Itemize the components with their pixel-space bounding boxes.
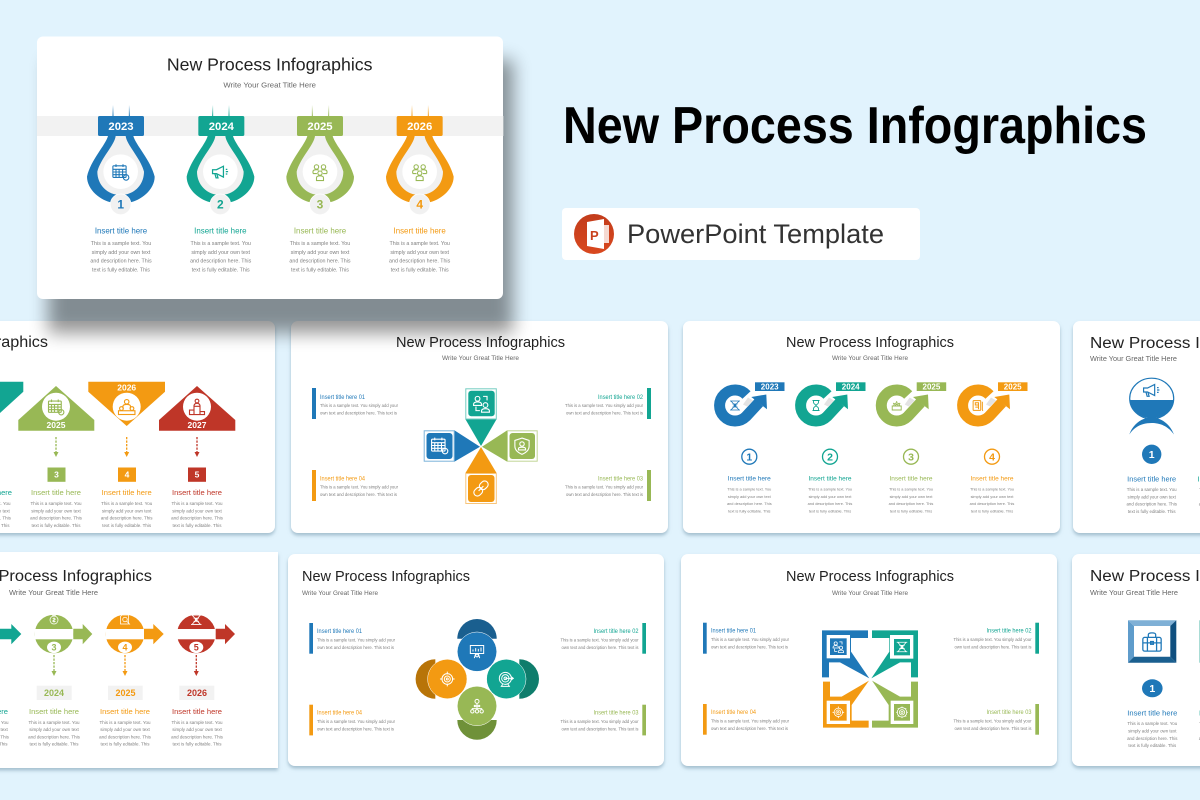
item descriptions: and description here. This bbox=[171, 516, 224, 521]
side labels right: This is a sample text. You simply add your bbox=[954, 637, 1032, 642]
drop step 3: 3 bbox=[317, 198, 324, 212]
item descriptions: text is fully editable. This bbox=[32, 523, 81, 528]
side labels left: Insert title here 04 bbox=[317, 710, 363, 716]
item descriptions: simply add your own text bbox=[100, 727, 151, 732]
slide title: New Process Infographics bbox=[302, 568, 470, 585]
item descriptions: This is a sample text. You bbox=[1127, 487, 1177, 492]
item descriptions: This is a sample text. You bbox=[28, 720, 80, 725]
side labels right: own text and description here. This text is bbox=[955, 645, 1032, 650]
main heading: New Process Infographics bbox=[563, 97, 1147, 155]
side labels right: Insert title here 02 bbox=[598, 395, 644, 401]
side labels right: Insert title here 02 bbox=[594, 629, 639, 635]
number badge bbox=[1142, 445, 1161, 464]
side labels right: own text and description here. This text is bbox=[955, 726, 1032, 731]
red arrow circle bbox=[177, 615, 235, 653]
panel: featured slide with drop shapes bbox=[37, 36, 513, 333]
side labels right: This is a sample text. You simply add your bbox=[565, 403, 644, 408]
side labels left bbox=[309, 623, 396, 735]
item descriptions: simply add your own text bbox=[102, 508, 152, 514]
item descriptions: and description here. This bbox=[101, 516, 153, 521]
side labels right bbox=[561, 623, 646, 735]
dashed arrows bbox=[52, 655, 199, 676]
number squares: 4 bbox=[125, 470, 130, 480]
side labels right: own text and description here. This text is bbox=[562, 645, 638, 650]
orange pentagon bbox=[88, 382, 165, 426]
side labels right: Insert title here 03 bbox=[986, 710, 1032, 716]
drop step 4: simply add your own text bbox=[390, 250, 449, 256]
item descriptions: simply add your own text bbox=[31, 508, 82, 514]
side labels left: This is a sample text. You simply add your bbox=[711, 637, 790, 642]
circular arrow 2025 orange: 2025 bbox=[1004, 383, 1022, 392]
item descriptions: text is fully editable. This bbox=[30, 742, 79, 746]
side labels left: own text and description here. This text is bbox=[711, 726, 788, 731]
drop step 2: simply add your own text bbox=[191, 250, 250, 256]
drop step 3: and description here. This bbox=[289, 259, 351, 265]
item descriptions: simply add your own text bbox=[728, 494, 772, 499]
side labels left: Insert title here 04 bbox=[320, 476, 366, 482]
item descriptions: simply add your own text bbox=[809, 494, 852, 499]
side labels right bbox=[954, 623, 1039, 735]
item descriptions: text is fully editable. This bbox=[728, 508, 771, 514]
circular arrow 2023: 2023 bbox=[761, 383, 779, 392]
item titles bbox=[1127, 476, 1200, 484]
side labels right: This is a sample text. You simply add your bbox=[954, 718, 1032, 724]
panel: slide with bevel frame (bottom far right) bbox=[1072, 554, 1200, 766]
slide title: New Process Infographics bbox=[396, 334, 565, 351]
drop step 1: text is fully editable. This bbox=[92, 267, 150, 273]
numbered circles: 2 bbox=[827, 452, 833, 464]
item descriptions: This is a sample text. You bbox=[30, 501, 82, 506]
item descriptions: and description here. This bbox=[970, 501, 1014, 506]
item descriptions: text is fully editable. This bbox=[1128, 509, 1176, 514]
slide title: New Process Infographics bbox=[167, 55, 372, 75]
item descriptions: and description here. This bbox=[889, 501, 933, 506]
item titles bbox=[1127, 710, 1200, 718]
circular arrow 2025 bbox=[881, 382, 946, 421]
item descriptions: text is fully editable. This bbox=[971, 508, 1013, 514]
drop step 4 bbox=[386, 105, 454, 273]
side labels right bbox=[565, 388, 651, 501]
side labels left: Insert title here 04 bbox=[711, 710, 757, 716]
slide subtitle: Write Your Great Title Here bbox=[9, 590, 98, 597]
icon: PowerPoint logo: P bbox=[590, 228, 599, 243]
drop step 1: 2023 bbox=[108, 121, 134, 133]
item titles: Insert title here bbox=[1127, 476, 1176, 484]
circular arrow 2023 bbox=[720, 382, 784, 421]
item descriptions: text is fully editable. This bbox=[809, 508, 851, 514]
number squares: 5 bbox=[195, 470, 200, 480]
item descriptions: This is a sample text. You bbox=[970, 486, 1014, 492]
item titles: Insert title here bbox=[102, 490, 152, 497]
side labels left: Insert title here 01 bbox=[320, 395, 366, 401]
item titles: Insert title here bbox=[172, 707, 222, 716]
drop step 3: text is fully editable. This bbox=[291, 267, 349, 273]
side labels right: This is a sample text. You simply add your bbox=[565, 484, 644, 490]
drop step 2: 2 bbox=[217, 198, 224, 212]
year boxes bbox=[37, 686, 214, 700]
side labels left bbox=[703, 623, 790, 735]
drop step 4: and description here. This bbox=[389, 259, 451, 265]
orange pentagon: 2026 bbox=[117, 382, 136, 392]
number badge: 1 bbox=[1149, 449, 1155, 461]
item descriptions: and description here. This bbox=[99, 734, 152, 740]
panel: slide with arrow circles (bottom left) bbox=[0, 552, 278, 768]
drop step 3: 2025 bbox=[307, 121, 333, 133]
item titles: Insert title here bbox=[29, 707, 79, 716]
side labels left: This is a sample text. You simply add your bbox=[320, 484, 399, 490]
drop step 1: This is a sample text. You bbox=[91, 241, 151, 247]
item descriptions: text is fully editable. This bbox=[101, 742, 150, 746]
slide title: New Process Infographics bbox=[786, 568, 954, 585]
item descriptions: simply add your own text bbox=[29, 727, 80, 732]
numbered circles bbox=[742, 449, 1000, 464]
item descriptions: and description here. This bbox=[1127, 736, 1178, 741]
numbered circles: 1 bbox=[746, 452, 752, 464]
slide subtitle: Write Your Great Title Here bbox=[832, 355, 908, 362]
slide subtitle: Write Your Great Title Here bbox=[442, 355, 519, 362]
slide title: New Process Infographics bbox=[786, 334, 954, 351]
drop step 2: text is fully editable. This bbox=[192, 267, 250, 273]
numbered circles: 3 bbox=[908, 452, 914, 464]
side labels left: own text and description here. This text is bbox=[711, 645, 788, 650]
drop step 2: Insert title here bbox=[194, 226, 247, 235]
item titles: Insert title here bbox=[808, 476, 852, 482]
slide subtitle: Write Your Great Title Here bbox=[1090, 590, 1178, 597]
badge label: PowerPoint Template bbox=[627, 219, 884, 249]
dashed arrows bbox=[54, 437, 200, 457]
item descriptions: text is fully editable. This bbox=[1128, 743, 1177, 748]
drop step 3: Insert title here bbox=[294, 226, 347, 235]
item descriptions: and description here. This bbox=[727, 501, 772, 506]
side labels right: This is a sample text. You simply add your bbox=[561, 638, 639, 642]
drop step 1: 1 bbox=[117, 198, 124, 212]
cross diagram bbox=[424, 389, 537, 504]
red pentagon: 2027 bbox=[188, 420, 207, 430]
slide subtitle: Write Your Great Title Here bbox=[832, 590, 908, 597]
item descriptions: This is a sample text. You bbox=[808, 486, 852, 492]
item descriptions bbox=[0, 501, 224, 528]
side labels left: This is a sample text. You simply add your bbox=[317, 638, 396, 642]
circular arrow 2024: 2024 bbox=[842, 383, 860, 392]
side labels left: Insert title here 01 bbox=[711, 629, 757, 635]
item titles bbox=[728, 476, 1014, 482]
drop step 3: simply add your own text bbox=[291, 250, 350, 256]
item descriptions: simply add your own text bbox=[172, 727, 223, 732]
item descriptions: This is a sample text. You bbox=[99, 720, 151, 725]
item descriptions bbox=[0, 720, 224, 746]
panel: slide with square brackets (bottom right) bbox=[681, 554, 1057, 766]
green arrow circle: 3 bbox=[51, 642, 57, 652]
number badge bbox=[1142, 679, 1163, 697]
item titles: Insert title here bbox=[172, 490, 222, 497]
drop step 4: This is a sample text. You bbox=[389, 241, 450, 247]
item descriptions: and description here. This bbox=[171, 734, 224, 740]
red pentagon bbox=[159, 386, 235, 431]
number squares: 3 bbox=[54, 470, 59, 480]
drop step 4: 2026 bbox=[407, 121, 432, 133]
green arrow circle bbox=[35, 615, 92, 653]
orange arrow circle: 4 bbox=[122, 642, 128, 652]
item descriptions: text is fully editable. This bbox=[890, 508, 932, 514]
side labels right: Insert title here 03 bbox=[594, 710, 639, 716]
item descriptions: text is fully editable. This bbox=[173, 742, 222, 746]
side labels left: Insert title here 01 bbox=[317, 629, 363, 635]
green pentagon bbox=[18, 386, 94, 431]
item descriptions: and description here. This bbox=[28, 734, 81, 740]
side labels left: This is a sample text. You simply add your bbox=[711, 718, 790, 724]
panel: slide with hourglass circle (top far right) bbox=[1073, 321, 1200, 533]
year boxes: 2026 bbox=[187, 688, 207, 698]
number badge: 1 bbox=[1149, 683, 1155, 695]
featured slide card bbox=[37, 36, 503, 299]
drop step 2: 2024 bbox=[209, 121, 235, 133]
year boxes: 2025 bbox=[115, 688, 136, 698]
item descriptions bbox=[1127, 721, 1200, 748]
item descriptions: This is a sample text. You bbox=[889, 486, 933, 492]
teal pentagon fragment bbox=[0, 382, 23, 413]
green pentagon: 2025 bbox=[47, 420, 66, 430]
item titles: Insert title here bbox=[31, 490, 81, 497]
side labels right: Insert title here 02 bbox=[986, 629, 1032, 635]
drop step 4: 4 bbox=[416, 198, 423, 212]
item descriptions bbox=[1126, 487, 1200, 514]
side labels right: own text and description here. This text is bbox=[566, 410, 643, 416]
drop step 1: simply add your own text bbox=[92, 250, 151, 256]
bracket diagram bbox=[822, 630, 918, 728]
item descriptions: This is a sample text. You bbox=[727, 486, 771, 492]
orange arrow circle bbox=[106, 615, 164, 653]
item descriptions: text is fully editable. This bbox=[102, 523, 152, 528]
drop step 4: text is fully editable. This bbox=[391, 267, 449, 273]
year boxes: 2024 bbox=[44, 688, 64, 698]
item titles: Insert title here bbox=[890, 476, 933, 482]
item descriptions: simply add your own text bbox=[1128, 728, 1177, 734]
side labels left: own text and description here. This text is bbox=[317, 645, 394, 650]
slide subtitle: Write Your Great Title Here bbox=[1090, 356, 1177, 363]
side labels right: This is a sample text. You simply add your bbox=[561, 719, 639, 724]
teal frame edge bbox=[1199, 620, 1200, 663]
drop step 3 bbox=[286, 105, 354, 273]
item titles: Insert title here bbox=[100, 707, 150, 716]
panel: slide with pentagons (top left) bbox=[0, 321, 275, 533]
teal arrow fragment bbox=[0, 624, 21, 644]
icon: PowerPoint logo bbox=[574, 214, 614, 254]
drop step 1 bbox=[87, 105, 155, 273]
item descriptions: This is a sample text. You bbox=[101, 501, 153, 506]
number squares bbox=[48, 468, 206, 482]
item descriptions: This is a sample text. You bbox=[171, 720, 223, 725]
side labels left bbox=[312, 388, 399, 501]
slide subtitle: Write Your Great Title Here bbox=[223, 80, 316, 89]
side labels left: own text and description here. This text is bbox=[317, 726, 394, 732]
badge: PowerPoint Template bbox=[562, 208, 920, 260]
gray band bbox=[37, 116, 503, 136]
circular arrow 2025: 2025 bbox=[923, 383, 941, 392]
drop step 1: Insert title here bbox=[95, 226, 148, 235]
drop step 1: and description here. This bbox=[90, 259, 152, 265]
item descriptions: and description here. This bbox=[808, 501, 852, 506]
side labels right: own text and description here. This text is bbox=[566, 492, 643, 497]
item descriptions: simply add your own text bbox=[890, 494, 933, 499]
item titles bbox=[0, 490, 222, 497]
item descriptions: simply add your own text bbox=[1128, 494, 1177, 500]
circular arrow 2024 bbox=[801, 382, 866, 421]
drop step 2: and description here. This bbox=[190, 259, 252, 265]
side labels right: own text and description here. This text is bbox=[562, 726, 638, 732]
circular arrow 2025 orange bbox=[963, 382, 1028, 421]
side labels left: This is a sample text. You simply add your bbox=[317, 719, 396, 724]
featured slide contents bbox=[37, 55, 503, 273]
item descriptions: simply add your own text bbox=[172, 508, 223, 514]
item titles: Insert title here bbox=[728, 476, 772, 482]
item titles: Insert title here bbox=[970, 476, 1014, 482]
panel: slide with circular arrows (top right) bbox=[683, 321, 1060, 533]
side labels right: Insert title here 03 bbox=[598, 476, 644, 482]
item descriptions: and description here. This bbox=[1126, 502, 1178, 506]
numbered circles: 4 bbox=[989, 452, 995, 464]
red arrow circle: 5 bbox=[194, 642, 199, 652]
item descriptions: and description here. This bbox=[30, 516, 83, 521]
featured slide shadow bbox=[48, 60, 513, 333]
drop step 2: This is a sample text. You bbox=[190, 241, 251, 247]
item descriptions: This is a sample text. You bbox=[171, 501, 223, 506]
drop step 3: This is a sample text. You bbox=[290, 241, 350, 247]
side labels left: own text and description here. This text is bbox=[320, 492, 397, 497]
hourglass icon shape bbox=[1129, 378, 1174, 434]
item descriptions: text is fully editable. This bbox=[173, 523, 222, 528]
slide subtitle: Write Your Great Title Here bbox=[302, 590, 378, 597]
item titles: Insert title here bbox=[1127, 710, 1177, 718]
panel: slide with overlapping circles (bottom middle) bbox=[288, 554, 664, 766]
side labels left: own text and description here. This text is bbox=[320, 410, 397, 416]
drop step 4: Insert title here bbox=[393, 226, 446, 235]
item descriptions: simply add your own text bbox=[971, 494, 1014, 499]
item titles bbox=[0, 707, 222, 716]
side labels left: This is a sample text. You simply add your bbox=[320, 403, 399, 408]
bevel frame icon bbox=[1128, 620, 1176, 663]
drop step 2 bbox=[187, 105, 254, 273]
item descriptions: This is a sample text. You bbox=[1127, 721, 1178, 726]
panel: slide with cross pointers (top middle) bbox=[291, 321, 668, 533]
item descriptions bbox=[727, 486, 1014, 514]
four circles diagram bbox=[416, 619, 539, 740]
